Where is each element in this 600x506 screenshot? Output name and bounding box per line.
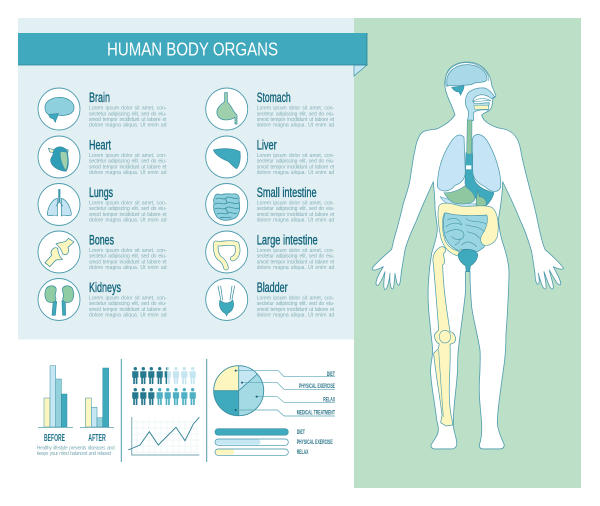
- icon: heart: [48, 147, 68, 171]
- pie chart with leader labels: [214, 366, 335, 417]
- organ: left lung: [437, 135, 465, 191]
- item: bladder: smod tempor incididunt ut labore et: [257, 307, 335, 313]
- item: stomach: smod tempor incididunt ut labore et: [257, 117, 335, 123]
- item: heart: Heart: [89, 138, 111, 152]
- item: liver: Lorem ipsum dolor sit amet, con-: [257, 153, 335, 159]
- item: lungs: sectetur adipiscing elit, sed do eiu-: [89, 206, 167, 212]
- item: small intestine: sectetur adipiscing elit, sed do eiu-: [257, 206, 335, 212]
- organ: heart and vessels: [465, 153, 494, 207]
- item: liver: sectetur adipiscing elit, sed do eiu-: [257, 159, 335, 165]
- item: brain: smod tempor incididunt ut labore et: [89, 117, 167, 123]
- progress bars: PHYSICAL EXERCISE: [297, 439, 333, 446]
- item: liver: [206, 136, 335, 178]
- item: stomach: [206, 88, 335, 130]
- organ: brain: [445, 63, 489, 95]
- title: HUMAN BODY ORGANS: [107, 39, 278, 60]
- pie chart with leader labels: RELAX: [323, 396, 335, 403]
- item: stomach: Lorem ipsum dolor sit amet, con-: [257, 106, 335, 112]
- item: bones: Bones: [89, 233, 114, 248]
- item: bones: Lorem ipsum dolor sit amet, con-: [89, 248, 167, 254]
- item: brain: [38, 88, 167, 130]
- item: lungs: dolore magna aliqua. Ut enim ad: [89, 218, 167, 224]
- organ: small intestine: [443, 213, 488, 252]
- item: brain: sectetur adipiscing elit, sed do eiu-: [89, 111, 167, 117]
- icon: small intestine: [214, 194, 240, 220]
- item: heart: sectetur adipiscing elit, sed do eiu-: [89, 159, 167, 165]
- item: kidneys: sectetur adipiscing elit, sed do eiu-: [89, 301, 167, 307]
- icon: kidneys: [45, 286, 74, 315]
- item: small intestine: smod tempor incididunt ut labore et: [257, 212, 335, 218]
- item: kidneys: smod tempor incididunt ut labore et: [89, 307, 167, 313]
- item: large intestine: [206, 231, 335, 273]
- panel: organ list background: [18, 18, 354, 340]
- item: bones: smod tempor incididunt ut labore et: [89, 259, 167, 265]
- icon: bones: [45, 238, 74, 267]
- icon: lungs: [47, 189, 71, 216]
- progress bars: [215, 429, 333, 456]
- item: bones: [38, 231, 167, 273]
- panel: body background: [354, 18, 581, 488]
- item: brain: Brain: [89, 90, 110, 105]
- item: bladder: dolore magna aliqua. Ut enim ad: [257, 313, 334, 319]
- icon: stomach: [217, 93, 237, 124]
- organ: large intestine: [438, 203, 498, 256]
- item: lungs: [38, 184, 167, 226]
- item: brain: dolore magna aliqua. Ut enim ad: [89, 123, 167, 129]
- organ: right lung: [473, 134, 501, 191]
- caption: [37, 446, 115, 457]
- item: kidneys: [38, 278, 167, 320]
- item: kidneys: dolore magna aliqua. Ut enim ad: [89, 313, 167, 319]
- icon: liver: [213, 149, 240, 169]
- item: small intestine: [206, 184, 335, 226]
- item: kidneys: Lorem ipsum dolor sit amet, con-: [89, 296, 167, 302]
- item: stomach: sectetur adipiscing elit, sed do eiu-: [257, 111, 335, 117]
- item: small intestine: Small intestine: [257, 185, 317, 200]
- item: heart: [38, 136, 167, 178]
- item: stomach: Stomach: [257, 90, 291, 105]
- item: large intestine: sectetur adipiscing elit, sed do eiu-: [257, 254, 335, 260]
- organ: airway and mouth: [465, 88, 495, 121]
- item: kidneys: Kidneys: [89, 280, 121, 295]
- item: heart: Lorem ipsum dolor sit amet, con-: [89, 153, 167, 159]
- pictogram: people: [132, 367, 196, 405]
- item: lungs: Lorem ipsum dolor sit amet, con-: [89, 200, 167, 206]
- item: large intestine: Lorem ipsum dolor sit amet, con-: [257, 248, 335, 254]
- item: large intestine: smod tempor incididunt ut labore et: [257, 259, 335, 265]
- icon: large intestine: [216, 243, 238, 268]
- item: large intestine: Large intestine: [257, 233, 318, 248]
- divider: [121, 359, 207, 462]
- item: stomach: dolore magna aliqua. Ut enim ad: [257, 123, 334, 129]
- label: before: BEFORE: [44, 433, 65, 444]
- item: liver: dolore magna aliqua. Ut enim ad: [257, 170, 334, 176]
- caption: keeps your mind balanced and relaxed: [37, 451, 111, 457]
- item: lungs: smod tempor incididunt ut labore et: [89, 212, 167, 218]
- icon: brain: [45, 97, 74, 122]
- item: liver: Liver: [257, 138, 277, 152]
- item: bladder: Bladder: [257, 280, 288, 295]
- item: bladder: [206, 278, 335, 320]
- pie chart with leader labels: PHYSICAL EXERCISE: [299, 383, 335, 390]
- item: bladder: sectetur adipiscing elit, sed do eiu-: [257, 301, 335, 307]
- item: lungs: Lungs: [89, 185, 113, 200]
- item: small intestine: Lorem ipsum dolor sit amet, con-: [257, 200, 335, 206]
- label: after: AFTER: [88, 433, 106, 444]
- organ: liver: [444, 186, 475, 204]
- caption: Healthy lifestyle prevents diseases and: [37, 446, 115, 452]
- bar chart: before and after: [38, 366, 114, 444]
- item: large intestine: dolore magna aliqua. Ut enim ad: [257, 265, 334, 271]
- organ: pancreas: [440, 197, 477, 208]
- item: heart: smod tempor incididunt ut labore et: [89, 164, 167, 170]
- item: bones: sectetur adipiscing elit, sed do eiu-: [89, 254, 167, 260]
- icon: bladder: [218, 286, 235, 316]
- human body figure: [372, 62, 564, 449]
- item: small intestine: dolore magna aliqua. Ut enim ad: [257, 218, 334, 224]
- body silhouette: [372, 62, 564, 449]
- pie chart with leader labels: DIET: [327, 371, 335, 378]
- organ: leg bones: [433, 247, 456, 426]
- title ribbon: [18, 33, 367, 76]
- line chart: [128, 417, 199, 455]
- organ: stomach: [476, 190, 486, 207]
- item: brain: Lorem ipsum dolor sit amet, con-: [89, 106, 167, 112]
- organ: bladder: [458, 249, 478, 272]
- item: liver: smod tempor incididunt ut labore et: [257, 164, 335, 170]
- organ: trachea: [467, 120, 472, 154]
- pie chart with leader labels: MEDICAL TREATMENT: [297, 410, 335, 417]
- item: bones: dolore magna aliqua. Ut enim ad: [89, 265, 167, 271]
- progress bars: DIET: [297, 429, 305, 436]
- item: heart: dolore magna aliqua. Ut enim ad: [89, 170, 167, 176]
- item: bladder: Lorem ipsum dolor sit amet, con-: [257, 296, 335, 302]
- progress bars: RELAX: [297, 449, 309, 456]
